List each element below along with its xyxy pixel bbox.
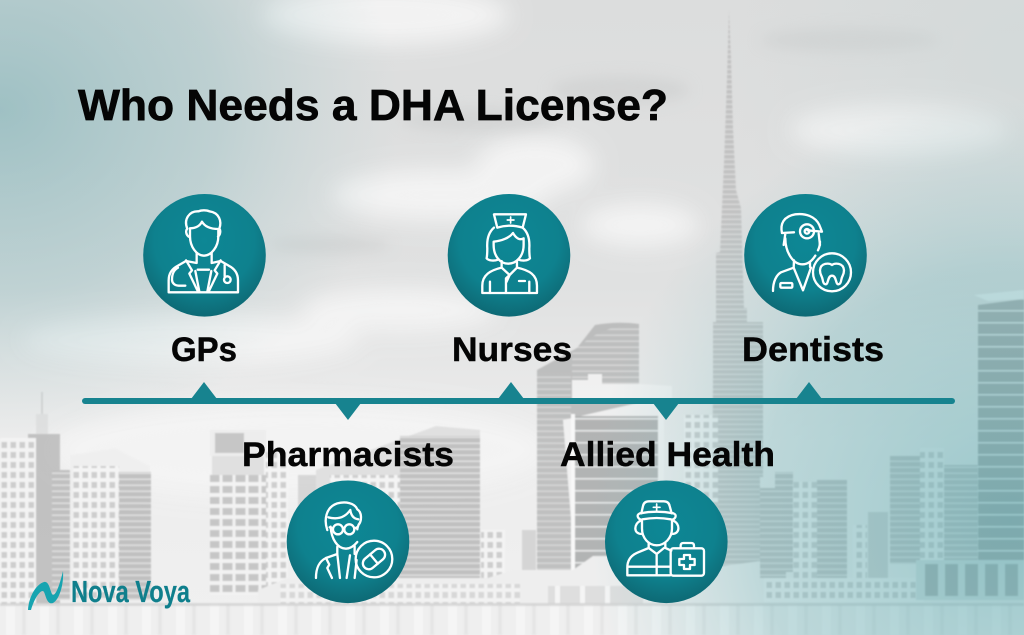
Burj Khalifa	[712, 10, 760, 528]
icon: paramedic with first aid kit	[627, 501, 704, 576]
label: Pharmacists: Pharmacists	[242, 436, 454, 474]
title: Who Needs a DHA License?	[78, 81, 668, 130]
item: Nurses	[448, 194, 572, 369]
logo wordmark: Nova Voya	[71, 574, 191, 609]
mid-left towers	[210, 430, 266, 456]
podium	[258, 556, 813, 608]
icon: pharmacist with glasses and pill	[316, 502, 392, 578]
label: Allied Health: Allied Health	[560, 436, 775, 474]
label: Nurses: Nurses	[452, 331, 572, 369]
timeline with pointers	[82, 382, 955, 420]
right cluster	[760, 488, 786, 578]
left cluster	[41, 392, 43, 432]
logo mark	[28, 571, 63, 610]
icon: nurse with cap	[482, 214, 537, 293]
icon: doctor with stethoscope	[169, 210, 238, 292]
label: GPs: GPs	[171, 331, 237, 369]
logo: Nova Voya	[28, 571, 191, 610]
icon: dentist with head mirror and tooth	[773, 214, 851, 291]
item: GPs	[143, 194, 266, 369]
item: Pharmacists	[242, 436, 454, 603]
item: Allied Health	[560, 436, 775, 603]
curved central tower	[537, 323, 639, 590]
label: Dentists: Dentists	[742, 331, 884, 369]
item: Dentists	[742, 194, 884, 369]
